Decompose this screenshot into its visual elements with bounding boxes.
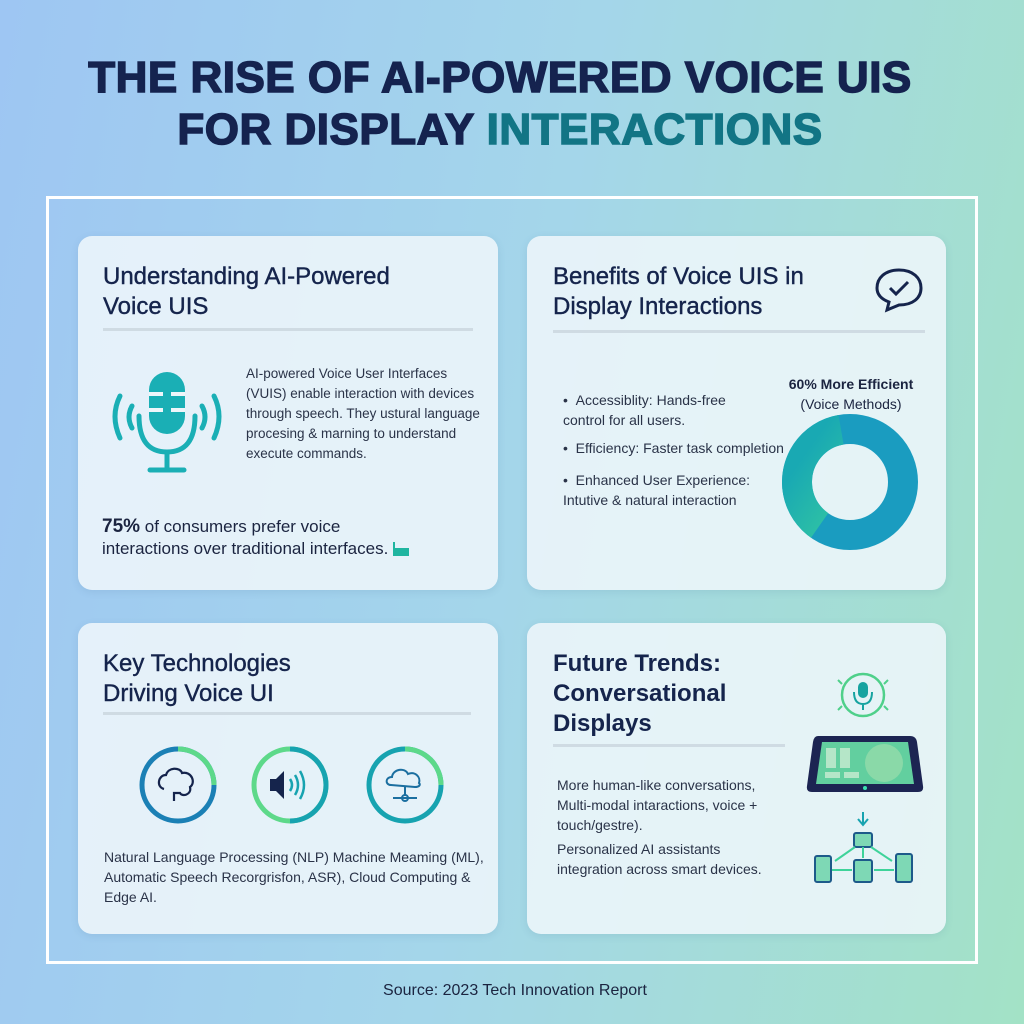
heading (103, 650, 291, 707)
panel: understanding (78, 236, 498, 590)
icon: chat check (876, 268, 922, 312)
text: description: AI-powered Voice User Interfaces (VUIS) enable interaction with devices through speech. They ustural language procesing & marning to understand execute commands. (246, 366, 480, 461)
title: FOR DISPLAY INTERACTIONS (177, 105, 823, 154)
heading: Display Interactions (553, 293, 762, 320)
donut label: 60% More Efficient (789, 376, 913, 392)
heading: Driving Voice UI (103, 680, 274, 707)
text: trends: More human-like conversations, Multi-modal intaractions, voice + touch/gestre). (557, 777, 757, 833)
panel: benefits (527, 236, 946, 590)
title: THE RISE OF AI-POWERED VOICE UIS (88, 53, 912, 102)
donut label: (Voice Methods) (800, 396, 902, 412)
source: Source: 2023 Tech Innovation Report (383, 982, 647, 999)
text: technologies: Natural Language Processing (NLP) Machine Meaming (ML), Automatic Speech Recorgrisfon, ASR), Cloud Computing & Edge AI. (104, 849, 484, 905)
heading (102, 263, 390, 320)
bullet list: Intutive & natural interaction (563, 492, 737, 508)
donut label (789, 376, 914, 412)
heading (553, 650, 726, 737)
bullet list: control for all users. (563, 412, 685, 428)
heading: Benefits of Voice UIS in (553, 263, 804, 290)
chart: donut (782, 414, 918, 550)
frame (46, 196, 978, 964)
title (88, 53, 912, 154)
stat: 75% (102, 516, 409, 558)
stat: 75%: 75% of consumers prefer voice (102, 516, 340, 537)
bullet list: • Enhanced User Experience: (563, 472, 750, 488)
icons: tech circles (140, 746, 444, 824)
heading: Key Technologies (103, 650, 291, 677)
icon: microphone (112, 372, 222, 472)
icon: display with mic and devices (806, 672, 924, 883)
bullet list (563, 392, 784, 508)
heading: Voice UIS (103, 293, 208, 320)
bullet list: • Accessiblity: Hands-free (563, 392, 726, 408)
stat: 75%: interactions over traditional interfaces. (102, 539, 388, 558)
bullet list: • Efficiency: Faster task completion (563, 440, 784, 456)
heading: Future Trends: (553, 650, 721, 677)
heading: Conversational (553, 680, 726, 707)
heading (553, 263, 804, 320)
panel: key technologies (78, 623, 498, 934)
heading: Displays (553, 710, 652, 737)
panel: future trends (527, 623, 946, 934)
heading: Understanding AI-Powered (103, 263, 390, 290)
panel: future trends: Personalized AI assistants integration across smart devices. (557, 841, 762, 877)
